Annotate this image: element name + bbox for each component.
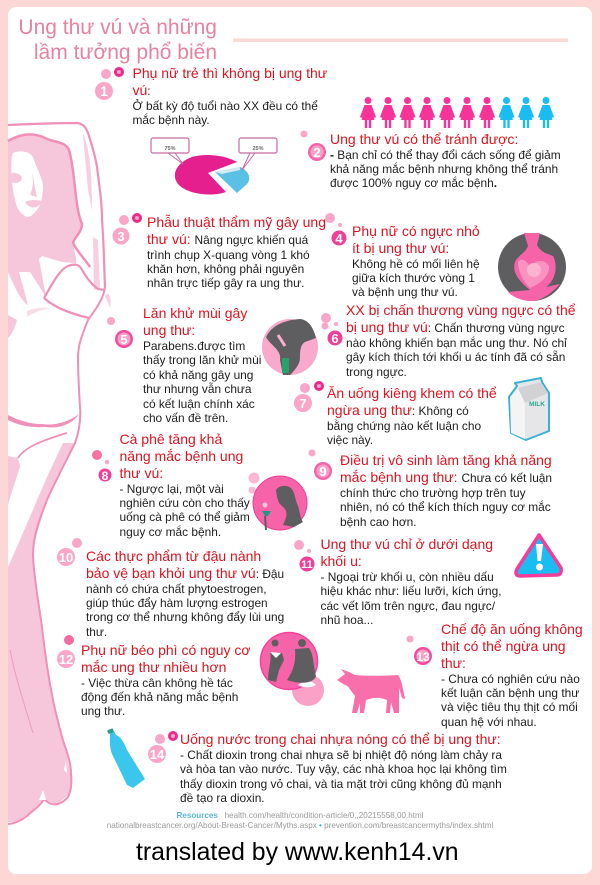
badge 8: 8 xyxy=(102,469,109,483)
text: myth 2: Ung thư vú có thể tránh được: xyxy=(330,130,518,146)
milk label: MILK xyxy=(529,401,545,408)
text: myth 4: Không hề có mối liên hệ xyxy=(352,256,480,270)
badge 12 xyxy=(57,635,75,668)
text: myth 6: nào không khiến bạn mắc ung thư. Nó chỉ xyxy=(346,336,567,350)
text: myth 11: khối u: xyxy=(320,553,362,569)
text: myth 5: ung thư: xyxy=(143,322,195,338)
text: myth 5: có khả năng gây ung xyxy=(143,368,253,382)
text: myth 1: Phụ nữ trẻ thì không bị ung thư xyxy=(132,64,327,80)
text: myth 7: Ăn uống kiêng khem có thể xyxy=(327,384,497,400)
text: myth 2: - Bạn chỉ có thể thay đổi cách sống để giảm xyxy=(330,148,561,162)
text: myth 13: kết luận căn bệnh ung thư xyxy=(441,686,579,700)
badge 2 xyxy=(300,130,326,161)
text: myth 4: ít bị ung thư vú: xyxy=(352,240,449,256)
badge 10 xyxy=(57,538,82,566)
text: myth 12: Phụ nữ béo phì có nguy cơ xyxy=(81,642,251,658)
title: Ung thư vú và những xyxy=(18,16,217,39)
text: myth 6 xyxy=(346,302,576,379)
face xyxy=(11,151,43,217)
text: myth 10: nành có chứa chất phytoestrogen, xyxy=(86,582,266,596)
text: myth 11: nhũ hoa... xyxy=(320,613,373,627)
text: myth 8: nghiên cứu còn cho thấy xyxy=(120,496,250,510)
text: myth 10: giúp thúc đẩy hàm lượng estrogen xyxy=(86,596,268,610)
text: myth 5: thư nhưng vẫn chưa xyxy=(143,382,252,396)
text: myth 2: được 100% nguy cơ mắc bệnh. xyxy=(330,176,497,190)
text: myth 1: vú: xyxy=(132,82,151,98)
badge 1 xyxy=(95,67,124,100)
title xyxy=(18,16,217,64)
text: myth 3: Phẫu thuật thẩm mỹ gây ung xyxy=(147,214,326,230)
title: lầm tưởng phổ biến xyxy=(34,41,217,64)
text: myth 4: Phụ nữ có ngực nhỏ xyxy=(352,222,480,238)
text: myth 10: trong cơ thể nhưng không đẩy lùi ung xyxy=(86,610,284,624)
text: myth 12 xyxy=(81,642,251,718)
text: myth 8: thư vú: xyxy=(120,464,163,480)
resources: nationalbreastcancer.org/About-Breast-Cancer/Myths.aspx • prevention.com/breastcancermyths/index.shtml xyxy=(107,821,493,830)
text: myth 6: trong ngực. xyxy=(346,365,407,379)
text: myth 7 xyxy=(327,384,497,447)
text: myth 12: động đến khả năng mắc bệnh xyxy=(81,690,238,704)
text: myth 1 xyxy=(132,64,327,127)
icon: milk carton xyxy=(509,378,549,440)
text: myth 9: mắc bệnh ung thư: Chưa có kết luận xyxy=(340,469,552,485)
badge 8 xyxy=(92,450,112,483)
text: myth 6: XX bị chấn thương vùng ngực có thể xyxy=(346,302,576,318)
text: myth 5 xyxy=(143,305,261,425)
badge 11: 11 xyxy=(301,559,313,571)
text: myth 1: Ở bất kỳ độ tuổi nào XX đều có thể xyxy=(132,98,318,112)
text: myth 8: uống cà phê có thể giảm xyxy=(120,510,250,524)
badge 3 xyxy=(112,213,142,244)
badge 13: 13 xyxy=(416,650,430,664)
text: myth 3: khăn hơn, không phải nguyên xyxy=(147,262,304,276)
icon: coffee woman circle xyxy=(248,472,307,530)
badge 5: 5 xyxy=(120,332,128,347)
text: myth 11: các vết lõm trên ngực, đau ngực/ xyxy=(320,599,495,613)
text: myth 13 xyxy=(441,620,583,729)
text: myth 9: bệnh cao hơn. xyxy=(340,515,417,529)
badge 2: 2 xyxy=(313,145,321,160)
badge 14 xyxy=(148,731,178,763)
badge 3: 3 xyxy=(117,229,125,244)
icon: warning triangle xyxy=(516,535,561,576)
text: myth 13: thư: xyxy=(441,654,466,670)
text: myth 8: năng mắc bệnh ung xyxy=(120,448,243,464)
text: myth 10: bảo vệ bạn khỏi ung thư vú: Đậu xyxy=(86,564,284,580)
text: myth 7: ngừa ung thư: Không có xyxy=(327,402,469,418)
text: myth 14 xyxy=(180,731,507,805)
badge 10: 10 xyxy=(59,550,73,565)
icon: ten women pictogram xyxy=(360,97,554,128)
badge 7 xyxy=(294,381,324,412)
icon: water bottle xyxy=(107,728,145,788)
text: myth 9: Điều trị vô sinh làm tăng khả năng xyxy=(340,452,552,468)
text: myth 5: Lăn khử mùi gây xyxy=(143,305,247,321)
text: myth 4: và bệnh ung thư vú. xyxy=(352,285,458,299)
icon: cow xyxy=(337,669,405,713)
text: myth 8: nguy cơ mắc bệnh. xyxy=(120,525,221,539)
text: myth 12: - Việc thừa cân không hề tác xyxy=(81,676,233,690)
text: myth 10: thư. xyxy=(86,625,107,639)
text: myth 7: bằng chứng nào kết luận cho xyxy=(327,418,481,432)
text: myth 5: thấy trong lăn khử mùi xyxy=(143,353,261,367)
text: myth 3: trình chụp X-quang vòng 1 khó xyxy=(147,248,310,262)
pie labels: 75% xyxy=(164,146,176,152)
icon: small breasts circle xyxy=(498,233,566,301)
badge 6: 6 xyxy=(331,331,339,346)
text: myth 13: thịt có thể ngừa ung xyxy=(441,638,566,654)
text: myth 14: và hòa tan vào nước. Tuy vậy, các nhà khoa học lại không tìm xyxy=(180,762,507,776)
text: myth 13: và việc tiêu thụ thịt có mối xyxy=(441,700,578,714)
text: myth 9: nhiên, nó có thể kích thích nguy cơ mắc xyxy=(340,500,551,514)
text: myth 3 xyxy=(147,214,326,290)
figure: woman silhouette xyxy=(8,123,111,824)
text: myth 6: bị ung thư vú: Chấn thương vùng ngực xyxy=(346,319,565,335)
resources xyxy=(107,811,493,830)
text: myth 2: khả năng mắc bệnh nhưng không thể tránh xyxy=(330,162,558,176)
text: myth 11 xyxy=(320,536,502,627)
text: myth 4 xyxy=(352,222,480,299)
text: myth 5: cho vấn đề trên. xyxy=(143,411,228,425)
text: myth 11: Ung thư vú chỉ ở dưới dạng xyxy=(320,536,493,552)
text: myth 10 xyxy=(86,548,284,639)
text: myth 3: thư vú: Nâng ngực khiến quá xyxy=(147,230,308,246)
badge 7: 7 xyxy=(299,396,307,411)
text: myth 2 xyxy=(330,130,561,190)
text: myth 6: gây kích thích tới khối u ác tính đã có sẵn xyxy=(346,350,565,364)
badge 11 xyxy=(294,540,314,572)
text: myth 12: ung thư. xyxy=(81,704,125,718)
badge 4: 4 xyxy=(335,231,343,246)
badge 13 xyxy=(406,636,432,665)
text: myth 4: giữa kích thước vòng 1 xyxy=(352,271,475,285)
text: myth 13: Chế độ ăn uống không xyxy=(441,620,583,636)
badge 4 xyxy=(325,213,346,246)
icon: deodorant circle xyxy=(262,319,318,375)
text: myth 5: Parabens.được tìm xyxy=(143,339,245,353)
text: myth 11: - Ngoại trừ khối u, còn nhiều dấu xyxy=(320,570,494,584)
icon: body shape circle xyxy=(260,632,324,706)
text: myth 14: - Chất dioxin trong chai nhựa sẽ bị nhiệt độ nóng làm chảy ra xyxy=(180,748,502,762)
text: myth 13: quan hệ với nhau. xyxy=(441,715,537,729)
badge 12: 12 xyxy=(59,652,73,667)
badge 9: 9 xyxy=(319,464,327,479)
text: myth 9 xyxy=(340,452,552,529)
text: myth 14: đề tạo ra dioxin. xyxy=(180,791,265,805)
text: myth 13: - Chưa có nghiên cứu nào xyxy=(441,672,580,686)
text: myth 14: thấy dioxin trong vỏ chai, và tia mặt trời cũng không đủ mạnh xyxy=(180,777,502,791)
text: myth 8 xyxy=(120,430,250,539)
badge 14: 14 xyxy=(150,747,165,762)
text: myth 1: mắc bệnh này. xyxy=(132,113,210,127)
icon: pie chart: 25% xyxy=(252,146,264,152)
icon: pie chart xyxy=(151,138,277,194)
text: myth 7: việc này. xyxy=(327,433,373,447)
text: myth 3: nhân trực tiếp gây ra ung thư. xyxy=(147,276,304,290)
text: myth 10: Các thực phẩm từ đậu nành xyxy=(86,548,261,564)
resources: Resources health.com/health/condition-article/0,,20215558,00.html xyxy=(176,811,424,820)
text: myth 14: Uống nước trong chai nhựa nóng có thể bị ung thư: xyxy=(180,731,501,747)
text: myth 11: hiệu khác như: liếu lưỡi, kích ứng, xyxy=(320,584,502,598)
badge 5 xyxy=(107,317,133,348)
text: myth 12: mắc ung thư nhiều hơn xyxy=(81,658,226,674)
badge 1: 1 xyxy=(100,83,108,99)
text: myth 8: Cà phê tăng khả xyxy=(120,430,222,446)
credit: translated by www.kenh14.vn xyxy=(136,839,459,866)
text: myth 8: - Ngược lại, một vài xyxy=(120,482,224,496)
badge 9 xyxy=(308,450,332,480)
text: myth 5: có kết luận chính xác xyxy=(143,397,255,411)
thigh xyxy=(8,443,75,822)
badge 6 xyxy=(321,313,342,346)
text: myth 9: chính thức cho trường hợp trên tuy xyxy=(340,486,526,500)
